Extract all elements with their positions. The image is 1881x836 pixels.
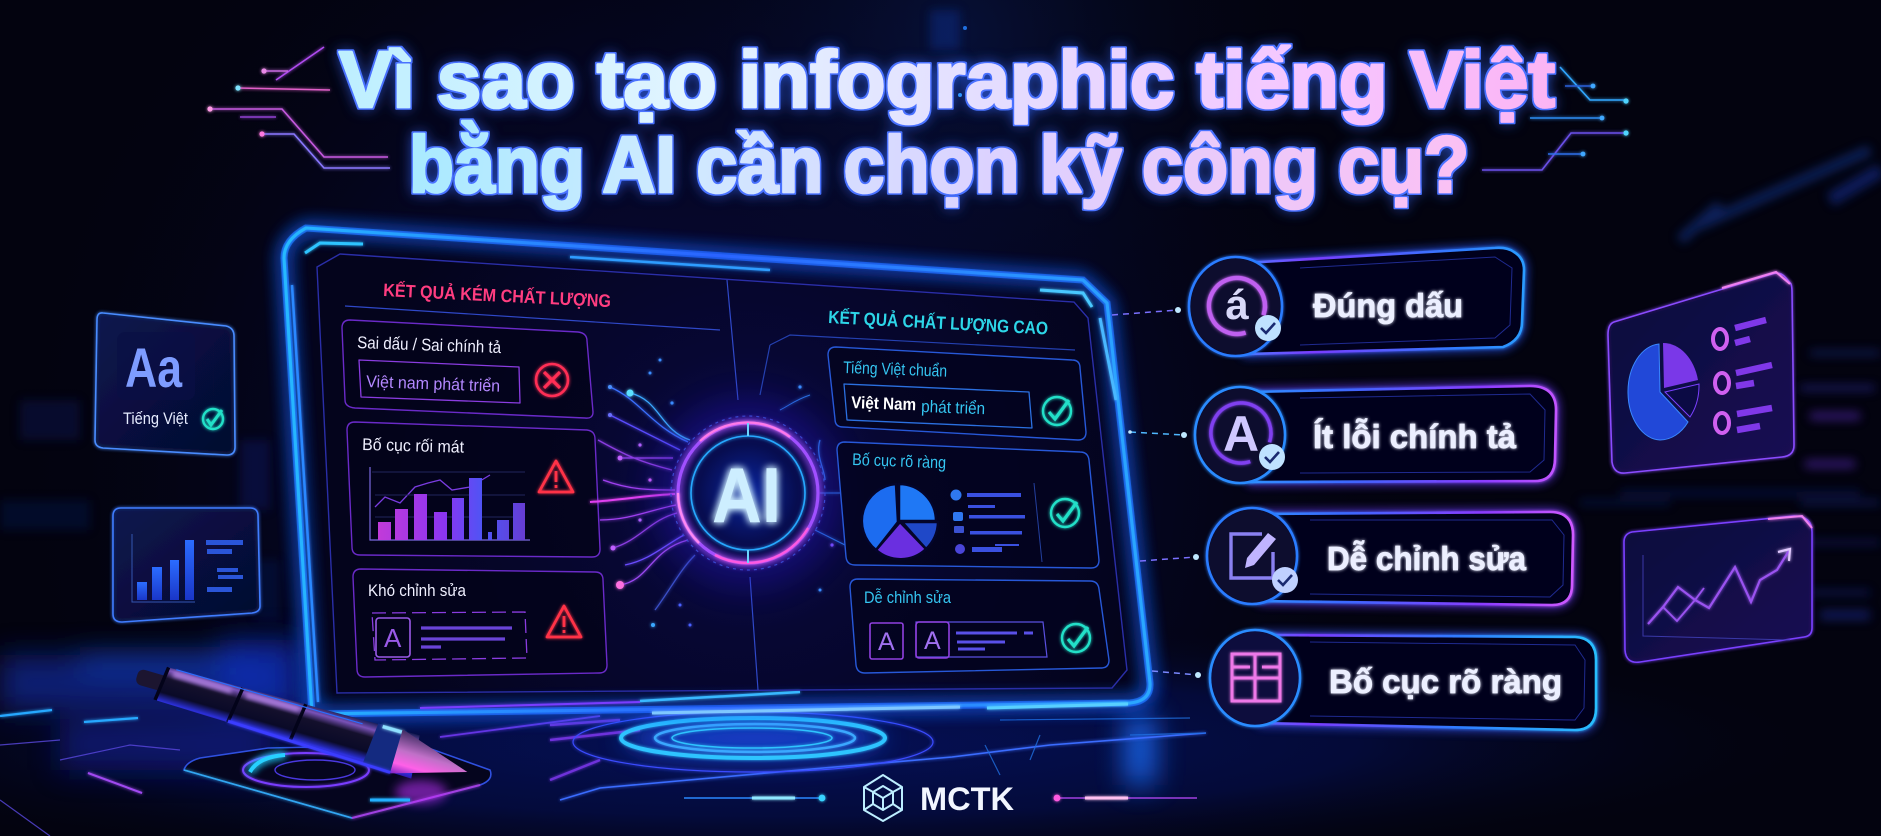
card: easy to edit <box>850 579 1109 673</box>
panel: high quality <box>760 306 1109 673</box>
text: AI: AI <box>712 451 781 539</box>
title circuit decoration right <box>1482 67 1629 170</box>
heading: poor quality: KẾT QUẢ KÉM CHẤT LƯỢNG <box>383 279 612 311</box>
text: card heading: Tiếng Việt chuẩn <box>843 358 947 381</box>
legend bars <box>206 540 243 592</box>
icon: error cross <box>536 364 568 396</box>
card: clear layout <box>837 442 1099 568</box>
floating card: bar chart <box>113 508 260 622</box>
icon: letter á: á <box>1225 281 1249 328</box>
icon: check <box>203 409 223 429</box>
main tablet <box>284 228 1150 714</box>
text: incorrect sample: Việt nam phát triển <box>366 372 500 396</box>
icon: Aa letters: Aa <box>125 336 183 399</box>
pie legend <box>950 490 1025 554</box>
floor with ripple and circuit lines <box>0 690 1206 836</box>
text: card heading: Sai dấu / Sai chính tả <box>357 333 502 357</box>
pie <box>1628 343 1699 440</box>
icon: layout grid <box>1210 630 1300 726</box>
floating card: pie chart <box>1608 272 1794 473</box>
text: card heading: Khó chỉnh sửa <box>368 581 466 600</box>
icon: letter A: A <box>1223 406 1259 462</box>
text box mock: A <box>384 623 402 653</box>
left floor haze <box>0 640 300 770</box>
text: correct sample continued: phát triển <box>921 397 985 418</box>
text: card heading: Bố cục rối mát <box>362 435 465 457</box>
feature: Ít lỗi chính tả <box>1195 386 1556 483</box>
legend <box>1713 320 1772 433</box>
feature: Dễ chỉnh sửa <box>1207 508 1573 605</box>
label: Đúng dấu <box>1313 287 1463 324</box>
title circuit decoration left <box>207 47 390 168</box>
input box <box>359 360 520 403</box>
text: correct sample: Việt Nam <box>851 393 916 414</box>
card: hard to edit <box>353 569 607 677</box>
icon: warning <box>539 461 573 492</box>
connectors to feature badges <box>1112 307 1201 678</box>
title <box>339 35 1555 209</box>
icon: letter á <box>1189 257 1282 356</box>
AI core circle <box>653 398 843 588</box>
floating card: line chart <box>1624 516 1812 662</box>
icon: edit pencil <box>1207 508 1298 604</box>
text box mock <box>372 612 527 660</box>
label: Dễ chỉnh sửa <box>1327 540 1527 577</box>
feature: Bố cục rõ ràng <box>1210 630 1596 730</box>
floating card: Tiếng Việt type sample <box>95 313 235 455</box>
card: messy layout <box>347 422 600 557</box>
text: card heading: Dễ chỉnh sửa <box>864 588 951 607</box>
footer logo <box>684 775 1197 821</box>
icon: letter A <box>1195 387 1285 483</box>
pen platform <box>184 745 491 818</box>
bars <box>137 540 194 600</box>
icon: check <box>1043 397 1071 425</box>
icon: check <box>1051 499 1079 527</box>
label: Bố cục rõ ràng <box>1329 663 1562 700</box>
frame inner accents <box>292 243 1128 713</box>
wordmark: MCTK <box>920 781 1014 817</box>
icon: warning <box>547 606 581 637</box>
title: Vì sao tạo infographic tiếng Việt <box>339 35 1555 124</box>
card: correct Vietnamese <box>828 347 1086 440</box>
divider lines <box>345 280 758 690</box>
line series <box>1648 549 1790 624</box>
pen <box>131 654 474 794</box>
accent line right <box>1054 795 1197 801</box>
text box mock: A <box>924 627 941 655</box>
neural connections <box>590 358 845 627</box>
pie chart <box>862 484 938 559</box>
icon: check <box>1062 624 1090 652</box>
accent line left <box>684 795 825 801</box>
text: card heading: Bố cục rõ ràng <box>852 450 946 472</box>
text box mock: A <box>878 628 895 656</box>
feature: Đúng dấu <box>1189 248 1524 356</box>
title: bằng AI cần chọn kỹ công cụ? <box>409 120 1469 209</box>
panel: poor quality <box>342 279 612 677</box>
card: wrong diacritics <box>342 320 593 418</box>
text box mock <box>870 622 1047 659</box>
label: Tiếng Việt: Tiếng Việt <box>123 409 188 428</box>
label: Ít lỗi chính tả <box>1313 418 1517 455</box>
bar chart <box>370 467 530 540</box>
heading: high quality: KẾT QUẢ CHẤT LƯỢNG CAO <box>828 306 1049 339</box>
input box <box>844 384 1032 428</box>
icon: cube hexagon <box>864 775 902 821</box>
